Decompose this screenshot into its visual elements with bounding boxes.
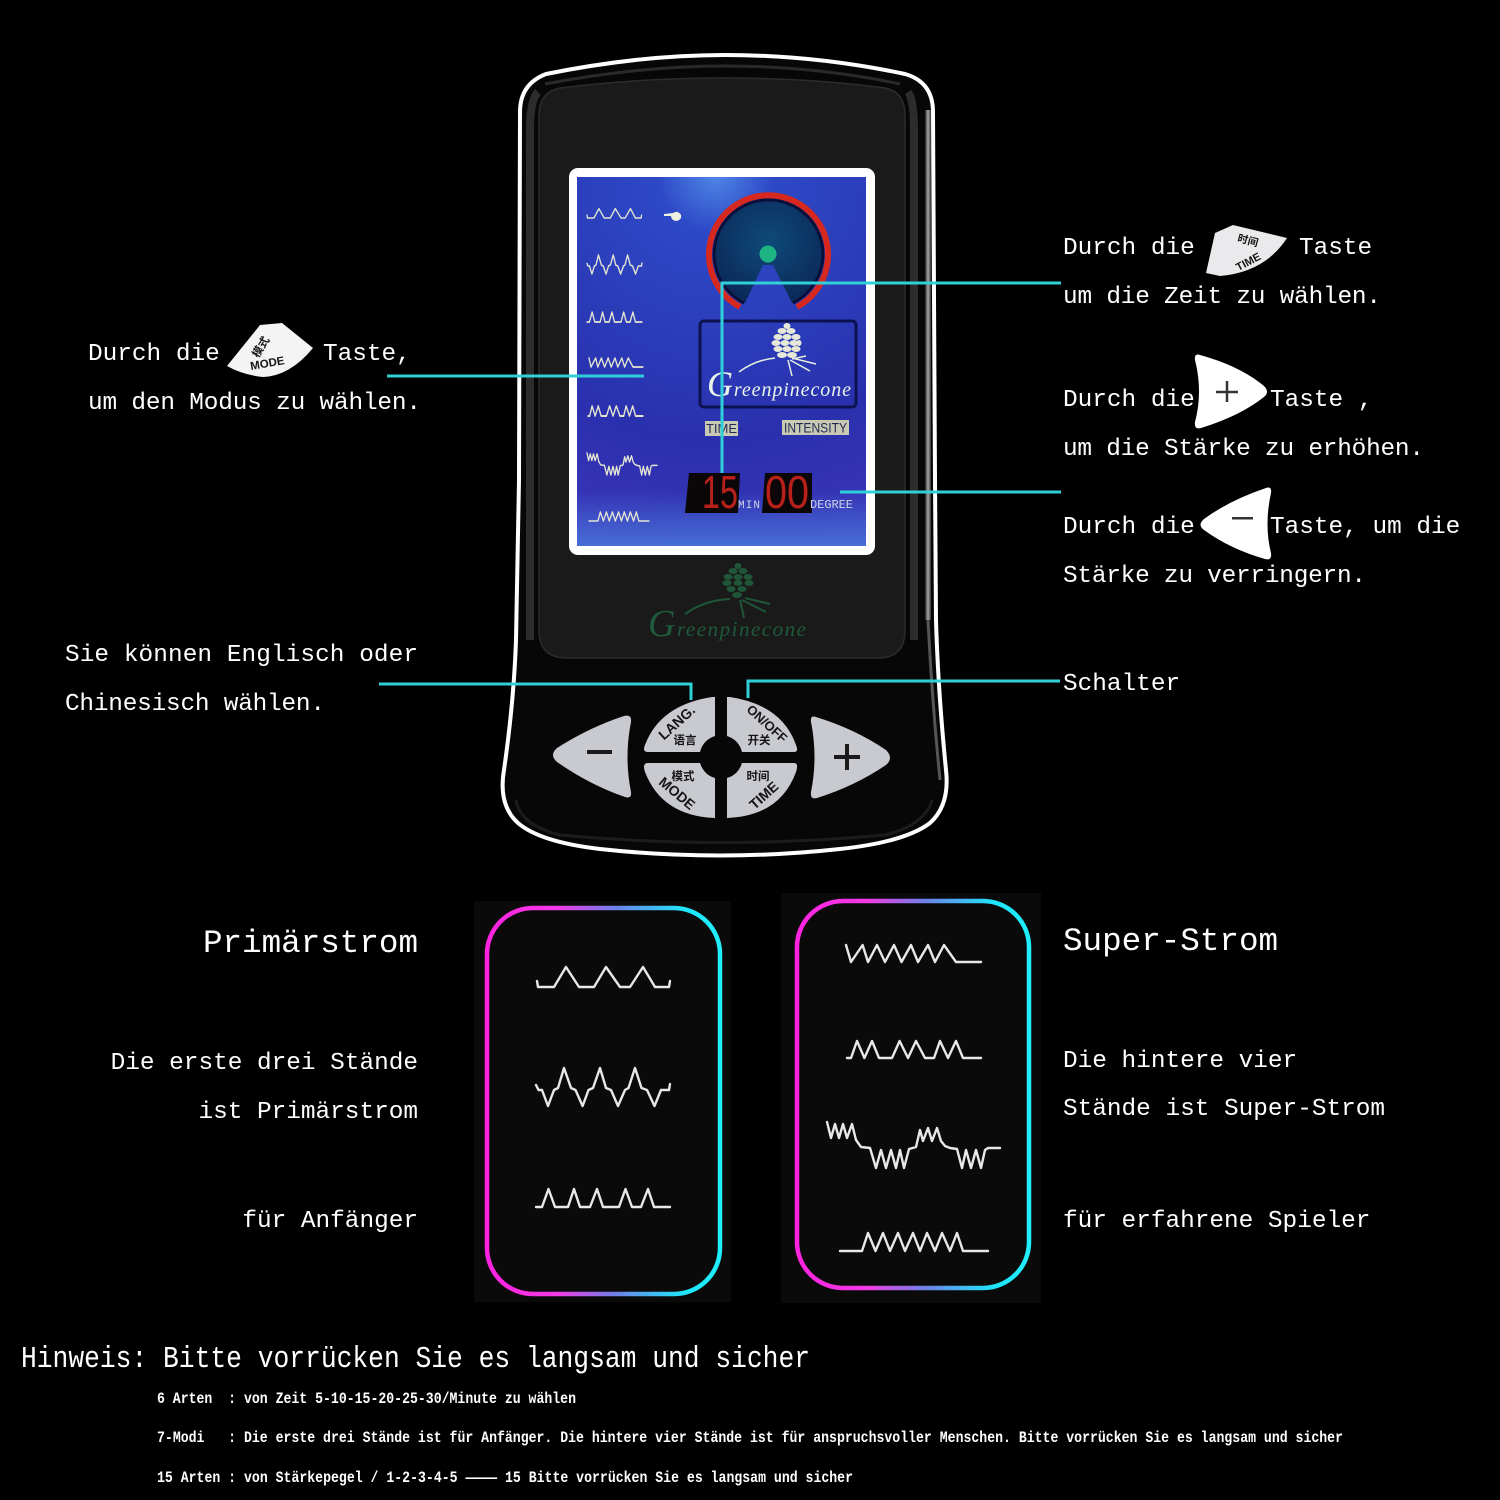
callout text: decrease: Durch die: [1063, 514, 1195, 541]
heading: Primärstrom: Primärstrom: [203, 925, 418, 962]
callout line: time: [722, 283, 1061, 473]
LCD mode waves: [587, 209, 657, 521]
branch: [739, 356, 816, 376]
callout line: intensity: [840, 490, 1061, 494]
pine cone: [772, 323, 802, 358]
button: TIME: 时间: [746, 769, 770, 783]
button: LANG: 语言: [674, 733, 696, 747]
callout text: increase: um die Stärke zu erhöhen.: [1063, 436, 1424, 463]
note heading: Hinweis: Bitte vorrücken Sie es langsam und sicher: [21, 1341, 810, 1377]
callout line: mode: [387, 374, 644, 378]
LED display: time: [685, 466, 740, 518]
printed logo: [648, 563, 806, 645]
icon: TIME key: TIME: [1234, 251, 1263, 274]
side bevels: [516, 66, 940, 842]
label: TIME: TIME: [706, 421, 737, 436]
button: MODE: 模式: [672, 769, 695, 783]
callout text: increase: Taste ,: [1270, 387, 1372, 414]
icon: minus key: [1200, 488, 1271, 559]
text block: super current: [1063, 1048, 1385, 1235]
LED unit: DEGREE: DEGREE: [810, 498, 853, 512]
callout text: increase: [1063, 355, 1424, 463]
callout text: time: Taste: [1299, 235, 1372, 262]
waveforms: primary: [536, 967, 670, 1207]
text block: primary current: ist Primärstrom: [198, 1099, 418, 1126]
icon: plus key: [1195, 355, 1267, 428]
button: MODE: MODE: [656, 774, 698, 813]
callout text: switch: Schalter: [1063, 671, 1180, 698]
text block: super current: Die hintere vier: [1063, 1048, 1297, 1075]
callout text: time: um die Zeit zu wählen.: [1063, 284, 1381, 311]
text block: primary current: für Anfänger: [242, 1208, 418, 1235]
heading: Super-Strom: Super-Strom: [1063, 923, 1278, 960]
printed branch: [685, 598, 770, 618]
callout text: decrease: [1063, 488, 1460, 590]
callout text: language: [65, 642, 418, 718]
button: minus: [553, 716, 631, 797]
button: MODE: [644, 763, 715, 818]
device body: [503, 55, 947, 856]
icon: TIME key: [1206, 225, 1287, 276]
gauge dial: [709, 195, 828, 307]
note details: [157, 1391, 1343, 1488]
LED display: time: 15: [702, 466, 738, 518]
note details: 6 Arten : von Zeit 5-10-15-20-25-30/Minute zu wählen: [157, 1391, 576, 1409]
text block: primary current: [111, 1050, 418, 1235]
icon: hand pointer: [664, 212, 681, 221]
label: INTENSITY: INTENSITY: [784, 420, 847, 436]
callout text: mode: [88, 323, 421, 417]
callout text: decrease: Taste, um die: [1270, 514, 1460, 541]
LED display: intensity: 00: [765, 466, 809, 518]
screen frame: [569, 168, 875, 555]
button: TIME: [727, 763, 797, 818]
panel: super current waves: [781, 893, 1041, 1303]
device: remote control: [503, 55, 947, 856]
icon: MODE key: 模式: [249, 334, 272, 360]
callout line: power switch: [748, 681, 1060, 698]
text block: super current: für erfahrene Spieler: [1063, 1208, 1370, 1235]
LCD screen: [577, 177, 866, 546]
icon: MODE key: [227, 323, 313, 377]
printed wordmark: Greenpinecone: [648, 603, 806, 645]
note details: 15 Arten : von Stärkepegel / 1-2-3-4-5 ———— 15 Bitte vorrücken Sie es langsam und sicher: [157, 1470, 853, 1488]
waveforms: super: [827, 945, 1000, 1251]
callout text: mode: um den Modus zu wählen.: [88, 390, 421, 417]
callout text: mode: Durch die: [88, 341, 220, 368]
button: LANG: LANG.: [655, 702, 698, 743]
callout text: time: Durch die: [1063, 235, 1195, 262]
LCD logo box: [700, 321, 856, 407]
button: TIME: TIME: [746, 778, 781, 812]
printed pine cone: [722, 563, 754, 598]
callout text: language: Chinesisch wählen.: [65, 691, 325, 718]
button: ON/OFF: [727, 697, 797, 752]
panel: primary current waves: [474, 901, 731, 1302]
callout text: decrease: Stärke zu verringern.: [1063, 563, 1366, 590]
note details: 7-Modi : Die erste drei Stände ist für Anfänger. Die hintere vier Stände ist für anspruchsvoller Menschen. Bitte vorrücken Sie es langsam und sicher: [157, 1430, 1343, 1448]
callout text: mode: Taste,: [323, 341, 411, 368]
button: LANG: [644, 697, 715, 752]
button: plus: [811, 717, 890, 798]
logo wordmark: Greenpinecone: [707, 364, 851, 404]
callout text: time: [1063, 225, 1381, 311]
icon: TIME key: 时间: [1236, 232, 1260, 250]
inner dark panel: [539, 78, 905, 658]
LED unit: MIN: MIN: [738, 500, 760, 512]
icon: MODE key: MODE: [249, 355, 286, 373]
callout text: increase: Durch die: [1063, 387, 1195, 414]
text block: primary current: Die erste drei Stände: [111, 1050, 418, 1077]
button: ON/OFF: 开关: [748, 733, 771, 747]
callout text: language: Sie können Englisch oder: [65, 642, 418, 669]
callout line: language: [379, 684, 691, 700]
text block: super current: Stände ist Super-Strom: [1063, 1096, 1385, 1123]
button: ON/OFF: ON/OFF: [744, 702, 790, 746]
